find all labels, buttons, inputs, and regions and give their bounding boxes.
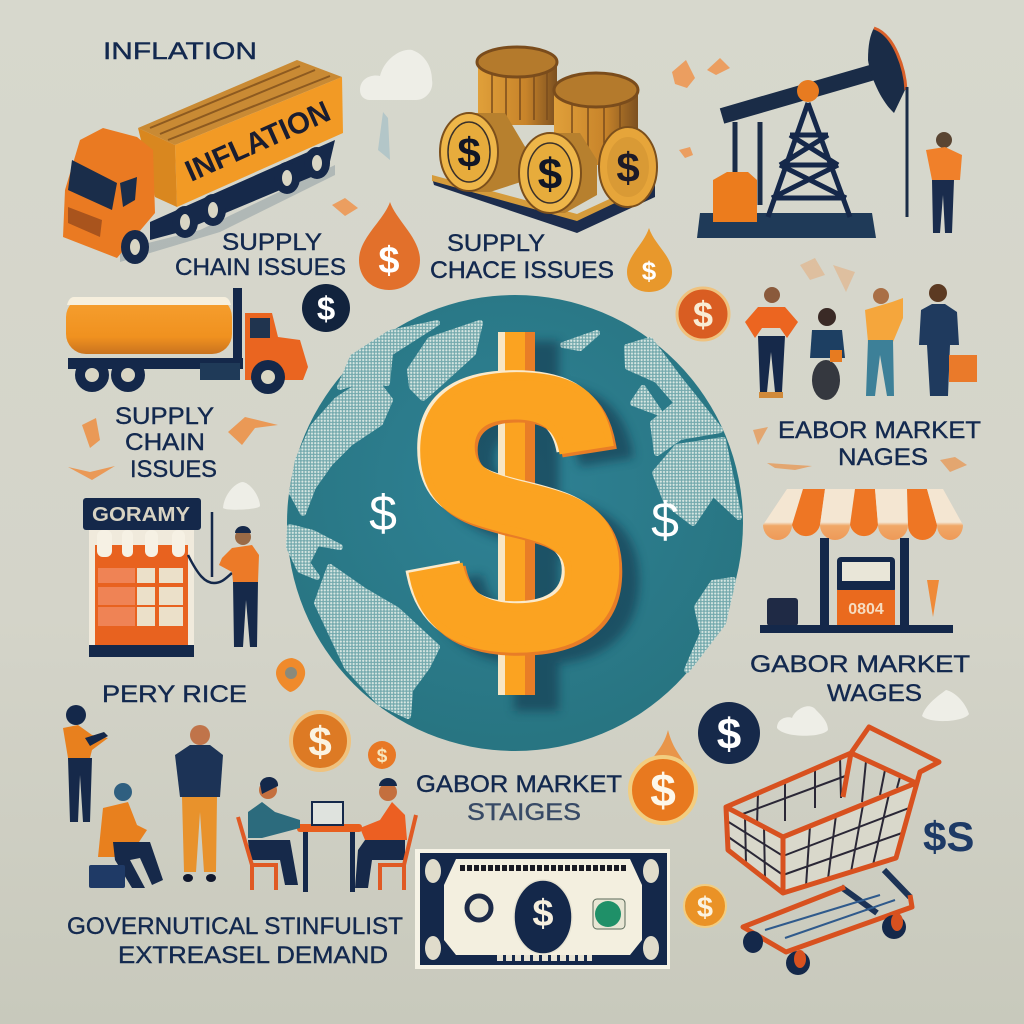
- hubs: [85, 368, 275, 384]
- text: supply chace issues: CHACE ISSUES: [430, 257, 614, 284]
- icon: small dollar left on globe: $: [369, 485, 397, 541]
- coin barrel 2: $: [538, 150, 562, 199]
- icon: yellow drop coin: $: [642, 256, 657, 286]
- coin barrel 3: $: [616, 144, 640, 191]
- text: gabor market staiges: STAIGES: [467, 799, 581, 826]
- windshield: [68, 160, 117, 210]
- derrick: [768, 103, 850, 217]
- truck chassis: [150, 140, 335, 240]
- base: [760, 625, 953, 633]
- text: supply chain issues 2: CHAIN: [125, 429, 205, 456]
- truck cab: [63, 128, 155, 258]
- icon: gold dollar coin: [291, 712, 349, 770]
- cart lower rails: [765, 895, 895, 938]
- window: [250, 318, 270, 338]
- globe with dollar sign: [287, 295, 743, 751]
- posts: [820, 538, 829, 628]
- icon: orange drop coin: $: [378, 240, 400, 282]
- man seated left: [238, 777, 300, 890]
- chassis: [68, 358, 243, 369]
- shop body: [89, 530, 194, 650]
- icon: small orange coin: $: [377, 746, 388, 767]
- motor box: [713, 172, 757, 222]
- icon: tanker truck: [66, 288, 308, 394]
- text: supply chace issues: [430, 230, 614, 284]
- icon: gold dollar coin: $: [308, 718, 332, 765]
- text: eabor market nages: [778, 417, 981, 471]
- portrait oval: [514, 880, 572, 954]
- machine: [767, 598, 798, 626]
- table with laptop: [297, 802, 362, 892]
- large dollar shadow: S: [423, 309, 649, 739]
- icon: small dollar right on globe: $: [651, 492, 679, 548]
- awning tabs: [97, 530, 185, 557]
- text: gabor market wages: [750, 651, 970, 707]
- continents: [289, 323, 739, 716]
- cart rim and handle: [726, 727, 939, 893]
- icon: shopping cart: [726, 727, 939, 975]
- coin barrel 1: [440, 113, 527, 192]
- icon: orange dollar coin: [677, 288, 729, 340]
- icon: oil pump jack: [697, 28, 962, 238]
- wheels: [75, 358, 285, 394]
- coin barrel 2: [519, 133, 597, 213]
- icon: orange ring charm: [276, 658, 305, 692]
- icon: orange paint specks top: [332, 58, 730, 216]
- beam: [722, 72, 874, 116]
- icon: cloud mid right: [777, 706, 828, 736]
- toolbox: [200, 363, 240, 380]
- icon: cloud top: [360, 50, 432, 100]
- platform: [697, 213, 876, 238]
- tank: [66, 297, 232, 354]
- shop sign text: GORAMY: [92, 504, 191, 526]
- truck wheels: [121, 147, 330, 264]
- heading: inflation: INFLATION: [103, 38, 257, 65]
- cab: [245, 313, 308, 380]
- icon: small gold coin: [684, 885, 726, 927]
- cart contents: [726, 783, 916, 893]
- worker 4: [919, 284, 977, 396]
- text: supply chain issues 2: [115, 403, 217, 483]
- text: eabor market nages: NAGES: [838, 444, 928, 471]
- note border: [415, 849, 670, 969]
- banknote dollar symbol: $: [532, 893, 554, 935]
- awning: [763, 489, 963, 540]
- text: gabor market wages: WAGES: [827, 680, 922, 707]
- horse head: [868, 28, 905, 113]
- text: gabor market staiges: [416, 771, 622, 826]
- icon: orange drop coin: [359, 202, 420, 290]
- man seated right: [355, 778, 416, 890]
- text: gabor market wages: GABOR MARKET: [750, 651, 970, 678]
- mast: [233, 288, 242, 368]
- icon: dollar banknote: [415, 849, 670, 969]
- cone: [927, 580, 939, 617]
- icon: dark dollar coin: [302, 284, 350, 332]
- icon: orange truck: [63, 60, 343, 264]
- worker 1: [745, 287, 798, 398]
- icon: orange specks left: [68, 417, 278, 480]
- green seal: [593, 899, 625, 929]
- icon: dark dollar coin large: $: [717, 710, 741, 759]
- text: supply chain issues 1: SUPPLY: [222, 229, 322, 256]
- icon: small cloud left: [223, 482, 260, 510]
- worker 2: [810, 308, 845, 400]
- cart stand: [841, 870, 910, 913]
- icon: drop with dollar coin: [630, 730, 696, 823]
- dollar S orange edge: S: [406, 300, 632, 730]
- icon: yellow drop coin: [627, 228, 672, 292]
- truck shadow: [120, 165, 335, 262]
- coin barrel 3: [599, 127, 657, 207]
- left seal: [467, 896, 491, 920]
- pump rod: [906, 87, 908, 217]
- icon: faint blue sketch: [378, 112, 390, 160]
- text: pery rice: PERY RICE: [102, 681, 247, 708]
- note center: [444, 859, 642, 955]
- sign: [83, 498, 201, 530]
- icon: orange specks above workers: [800, 258, 855, 292]
- people at work: [63, 705, 416, 892]
- tank highlight: [67, 297, 231, 305]
- base: [89, 645, 194, 657]
- text: cart dollars: $S: [923, 813, 974, 860]
- icon: orange specks right: [753, 427, 967, 472]
- dollar S cream edge: S: [400, 295, 626, 725]
- seated person: [89, 783, 163, 888]
- pump: [837, 557, 895, 593]
- standing man in suit: [175, 725, 223, 882]
- product panels: [98, 568, 183, 626]
- cargo end: [138, 128, 177, 207]
- icon: barrels and coins: [432, 47, 657, 233]
- pump price: 0804: [848, 601, 884, 618]
- coin barrel 1: $: [457, 129, 481, 176]
- text: supply chace issues: SUPPLY: [447, 230, 545, 257]
- corners: [425, 859, 659, 960]
- wheel hubs: [130, 155, 322, 255]
- icon: small gold coin: $: [697, 892, 713, 924]
- icon: dark dollar coin large: [698, 702, 760, 764]
- cargo side: [175, 77, 343, 207]
- text: supply chain issues 2: ISSUES: [130, 456, 217, 483]
- icon: storefront with awning: [760, 489, 963, 633]
- grille: [68, 207, 102, 237]
- icon: cloud right: [922, 690, 969, 721]
- barrel 2: [554, 90, 638, 165]
- dollar vertical bar: [498, 332, 535, 695]
- text: supply chain issues 1: [175, 229, 346, 281]
- cart wheels: [743, 913, 906, 975]
- text: governutical stinfulist extreasel demand: [67, 913, 403, 969]
- text: supply chain issues 1: CHAIN ISSUES: [175, 254, 346, 281]
- posts: [735, 122, 760, 205]
- worker 3: [865, 288, 903, 396]
- text: governutical stinfulist extreasel demand: EXTREASEL DEMAND: [118, 942, 388, 969]
- attendant: [219, 526, 259, 647]
- pivot: [797, 80, 819, 102]
- dollar S face: S: [403, 297, 629, 727]
- cart lower frame: [743, 887, 912, 952]
- icon: drop with dollar coin: $: [650, 764, 676, 816]
- bottom row: [497, 955, 592, 961]
- icon: orange dollar coin: $: [693, 294, 713, 335]
- worker: [926, 132, 962, 233]
- truck label: INFLATION: [180, 95, 335, 188]
- text: supply chain issues 2: SUPPLY: [115, 403, 214, 430]
- icon: dark dollar coin: $: [317, 290, 335, 327]
- pallet: [432, 178, 655, 233]
- barrel 1: [478, 60, 557, 125]
- cargo top: [138, 60, 342, 145]
- text: governutical stinfulist extreasel demand: GOVERNUTICAL STINFULIST: [67, 913, 403, 940]
- cart grid: [727, 757, 909, 886]
- text: eabor market nages: EABOR MARKET: [778, 417, 981, 444]
- standing woman with tablet: [63, 705, 108, 822]
- icon: gas shop: [83, 498, 259, 657]
- text: gabor market staiges: GABOR MARKET: [416, 771, 622, 798]
- top serial row: [460, 865, 626, 871]
- side window: [120, 177, 137, 207]
- group of four workers: [745, 284, 977, 400]
- hose: [188, 512, 232, 583]
- icon: small orange coin: [368, 741, 396, 769]
